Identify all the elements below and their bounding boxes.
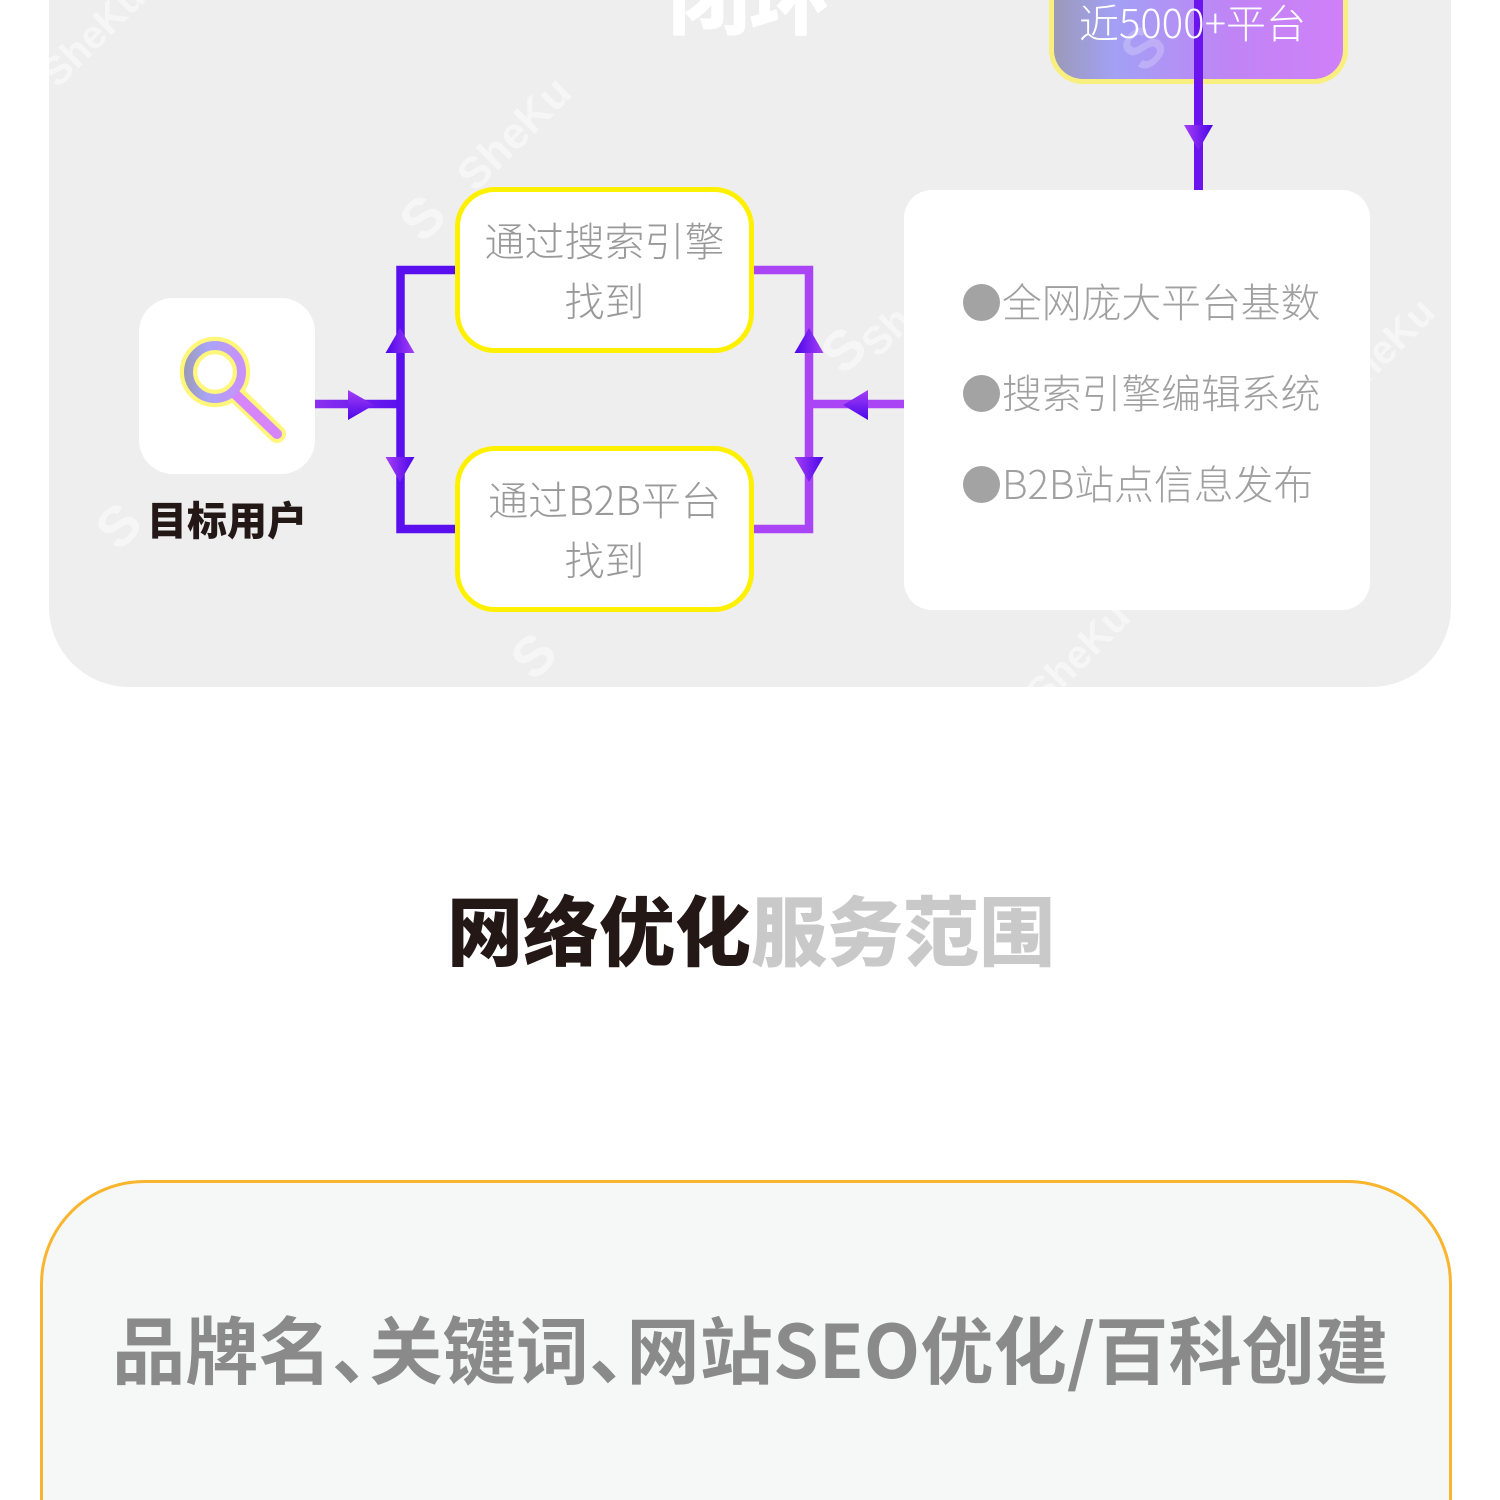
list item 2: 搜索引擎编辑系统 <box>1002 363 1320 420</box>
text: S <box>83 490 154 561</box>
bullet 2 <box>963 375 1000 412</box>
box: found via search engine: 通过搜索引擎 <box>484 210 724 268</box>
connector lines and arrows <box>315 0 1213 534</box>
icon: magnifying glass <box>180 336 286 443</box>
card: target user icon <box>139 298 315 474</box>
text: S <box>498 620 569 691</box>
text: service list: 品牌名、关键词、网站SEO优化/百科创建 <box>112 1294 1388 1400</box>
arrow: left column up <box>386 328 414 353</box>
line: platforms to info panel <box>1184 0 1213 190</box>
text: S <box>1108 12 1179 83</box>
box: found via search engine: 找到 <box>564 270 644 328</box>
bullet 3 <box>963 466 1000 503</box>
box: nearly 5000 platforms <box>1049 0 1348 84</box>
line: channels to info panel <box>754 270 904 529</box>
list item 1: 全网庞大平台基数 <box>1002 272 1320 329</box>
text: SheKu <box>853 245 974 365</box>
label: target user: 目标用户 <box>147 489 307 547</box>
arrow: left column down <box>386 457 414 482</box>
panel: channels list <box>904 190 1370 610</box>
line: user to two channels <box>315 270 455 529</box>
text: SheKu <box>1018 595 1139 715</box>
panel: closed loop diagram <box>49 0 1451 687</box>
box: found via B2B platform: 找到 <box>564 528 644 586</box>
box: found via search engine <box>455 187 754 353</box>
arrow: user right <box>348 390 374 420</box>
text: S <box>387 182 458 253</box>
text: S <box>808 314 879 385</box>
box: found via B2B platform: 通过B2B平台 <box>488 468 721 526</box>
heading: network optimization service scope: 网络优化服务范围 <box>447 872 1055 982</box>
panel: services <box>40 1180 1452 1500</box>
arrow: info panel left <box>843 390 868 420</box>
box: found via B2B platform <box>455 446 754 612</box>
bullet 1 <box>963 284 1000 321</box>
arrow: right column up <box>794 328 824 353</box>
arrow: right column down <box>794 457 824 482</box>
text: SheKu <box>448 67 581 200</box>
list item 3: B2B站点信息发布 <box>1002 454 1313 511</box>
text: SheKu <box>1323 290 1444 410</box>
